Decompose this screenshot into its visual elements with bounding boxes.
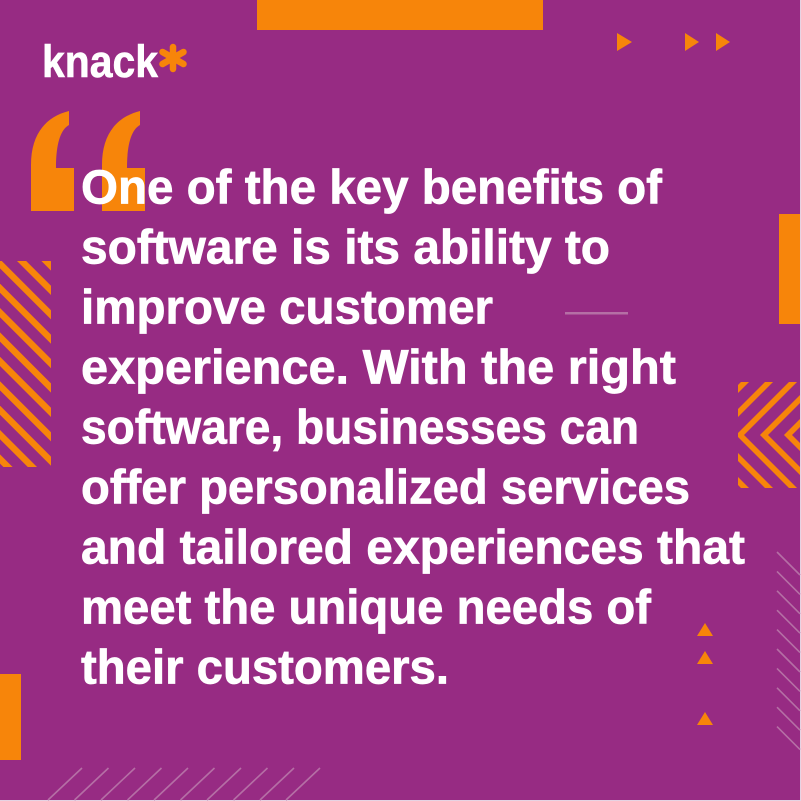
- icon: logo asterisk: [162, 47, 184, 69]
- quote text: improve customer: [81, 282, 493, 334]
- left diagonal stripes pattern: [0, 261, 51, 467]
- right-side light diagonal lines: [777, 552, 800, 750]
- left orange bar: [0, 674, 21, 760]
- quote text: offer personalized services: [81, 462, 690, 514]
- short light divider line: [565, 312, 628, 314]
- icon: opening quotation marks: [31, 111, 145, 211]
- quote text: their customers.: [81, 642, 449, 694]
- quote text: and tailored experiences that: [81, 522, 745, 574]
- quote text: meet the unique needs of: [81, 582, 652, 634]
- right orange bar: [779, 214, 800, 324]
- icon: right-pointing triangles: [617, 33, 730, 51]
- quote text: software, businesses can: [81, 402, 639, 454]
- quote text: One of the key benefits of: [81, 162, 663, 214]
- logo: knack: knack: [42, 36, 159, 87]
- top orange bar: [257, 0, 543, 30]
- bottom light diagonal lines: [48, 768, 320, 800]
- quote text: experience. With the right: [81, 342, 676, 394]
- icon: up-pointing triangles: [697, 623, 713, 725]
- quote text: software is its ability to: [81, 222, 610, 274]
- quote text: [81, 162, 745, 694]
- right chevron stripes pattern: [738, 382, 800, 488]
